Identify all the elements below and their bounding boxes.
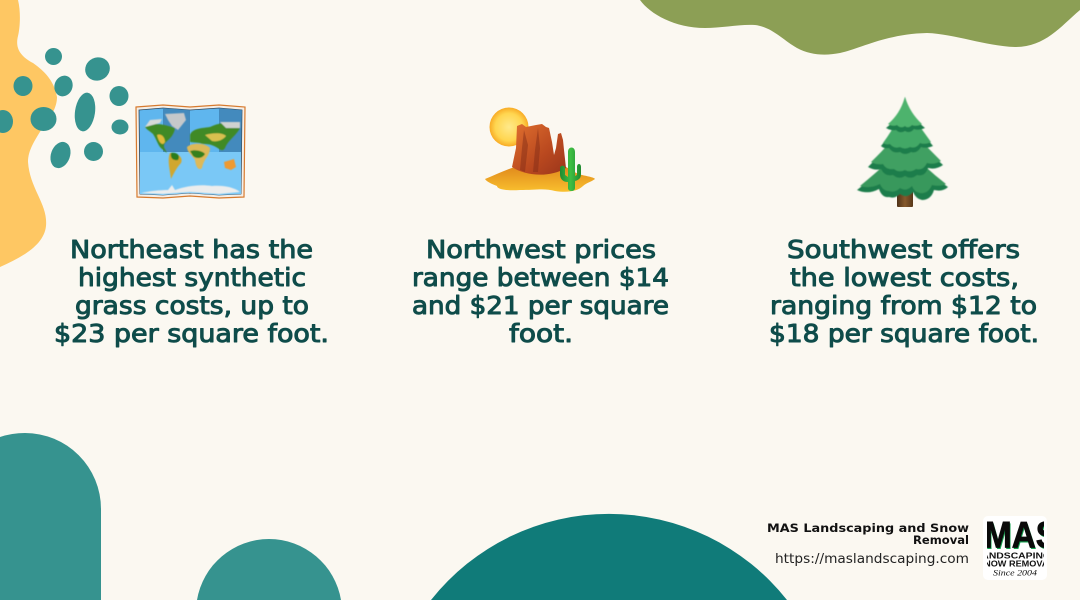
logo: MAS xyxy=(984,514,1058,556)
sun xyxy=(490,108,528,146)
text block: Northeast: $23 per square foot. xyxy=(54,319,329,348)
text block: Southwest: $18 per square foot. xyxy=(769,319,1039,348)
text block: Northeast: highest synthetic xyxy=(78,263,306,292)
text block: Southwest: Southwest offers xyxy=(787,235,1020,264)
icon: folded world map xyxy=(136,105,245,198)
shape: tall teal arch xyxy=(0,433,101,600)
sand xyxy=(485,167,595,192)
blob: olive top right xyxy=(640,0,1080,55)
text block: Northwest: foot. xyxy=(509,319,573,348)
company name xyxy=(767,521,969,547)
cactus xyxy=(560,148,581,191)
foliage xyxy=(857,97,948,200)
logo xyxy=(983,516,1047,580)
logo: SNOW REMOVAL xyxy=(978,558,1054,568)
text block: Northeast xyxy=(54,235,329,348)
text block: Northeast: Northeast has the xyxy=(70,235,313,264)
dots: teal cluster xyxy=(0,48,128,171)
logo: MAS xyxy=(985,516,1059,557)
text block: Northwest: and $21 per square xyxy=(412,291,669,320)
logo: Since 2004 xyxy=(993,568,1037,578)
text block: Northwest: Northwest prices xyxy=(426,235,656,264)
company name: Removal xyxy=(913,533,969,547)
text block: Southwest: ranging from $12 to xyxy=(770,291,1037,320)
shape: dark teal dome xyxy=(431,514,787,600)
text block: Southwest xyxy=(769,235,1039,348)
text block: Northwest: range between $14 xyxy=(412,263,669,292)
trunk xyxy=(897,188,913,207)
butte xyxy=(512,124,566,175)
icon: pine tree xyxy=(857,97,948,207)
text block: Northeast: grass costs, up to xyxy=(75,291,309,320)
icon: desert with butte and sun xyxy=(485,108,595,192)
text block: Southwest: the lowest costs, xyxy=(790,263,1019,292)
shape: teal semicircle xyxy=(197,539,341,600)
text block: Northwest xyxy=(412,235,669,348)
company name: MAS Landscaping and Snow xyxy=(767,521,969,535)
blob: yellow left xyxy=(0,0,57,267)
website url: https://maslandscaping.com xyxy=(775,551,969,567)
logo: LANDSCAPING xyxy=(975,550,1051,560)
